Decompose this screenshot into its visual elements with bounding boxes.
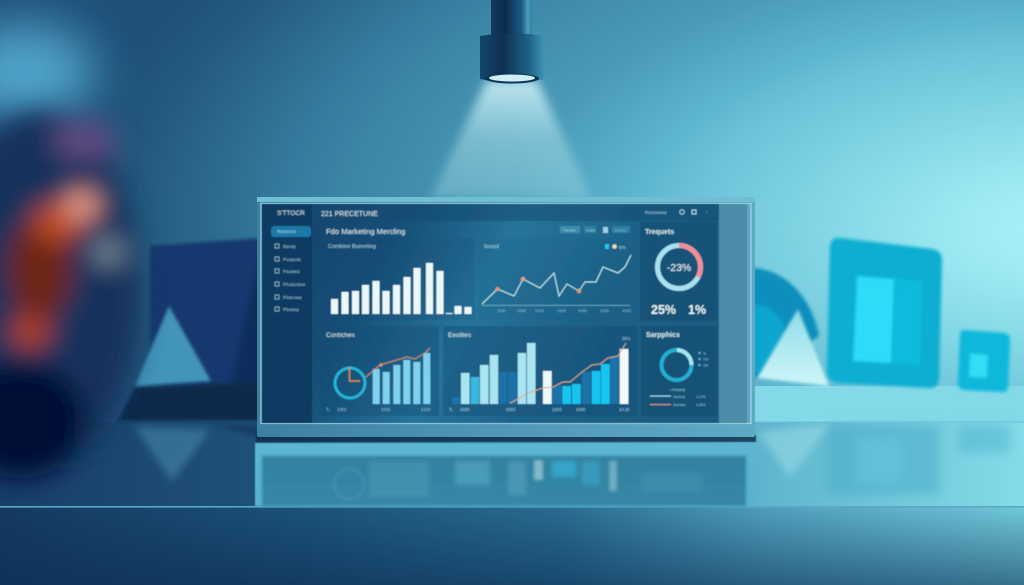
arc shape [750,268,819,378]
panel: summary donut: Jor [703,364,709,368]
floor [0,422,1024,507]
sidebar [262,204,312,423]
monitor frame [257,197,755,437]
blurred triangle left [135,306,211,386]
panel: donut gauge: 1% [688,303,706,317]
background wall [0,0,1024,424]
floor line [0,506,1024,508]
lamp [480,0,544,84]
panel: mixed bar chart: Eeolites [448,332,472,339]
panel: line chart: 1005 [517,308,527,313]
dark block shadow [230,248,262,386]
light triangle [757,309,829,386]
panel: line chart: 1000 [622,308,632,313]
sidebar: S'TTOCR [277,210,305,217]
panel: mixed bar chart: 1040 [576,407,586,412]
top bar: Rersonsve [645,210,667,215]
panel: summary donut: Sarpphics [646,332,680,339]
triangle reflection left [135,427,210,482]
blurred orange sphere [0,112,140,478]
filter tabs: Sroces [614,228,626,232]
small square [958,330,1010,392]
panel: summary donut: 3₁ [703,352,707,356]
panel: mixed bar chart [443,326,637,416]
panel: line chart [478,238,637,320]
blurred halo top left [0,24,95,120]
panel: donut gauge: -23% [667,262,691,274]
panel: mixed bar chart: T₁ [449,407,454,412]
panel: combo chart: 1303 [337,407,347,412]
panel: line chart: 1030 [578,308,588,313]
panel: summary donut: 1.819 [696,403,706,407]
panel: summary donut: 1.170 [696,395,706,399]
dark ledge left [118,382,262,421]
monitor shadow on floor [256,435,756,442]
blurred shapes right [750,238,1010,495]
filter tabs: Tiwnee [563,228,577,232]
top bar [312,204,719,221]
panel: summary donut: Socstor [673,403,687,407]
sidebar: Puopeds [283,257,302,262]
panel: line chart: 1025 [600,308,610,313]
large square [827,238,942,388]
panel: line chart: 0% [619,245,627,251]
panel: summary donut: • Rolanty [670,388,685,392]
panel: mixed bar chart: 1303 [552,407,562,412]
panel: combo chart: 1420 [421,407,431,412]
filter tabs [560,226,630,233]
sidebar: Reutonce [277,229,297,234]
sidebar: Pleaasy [283,307,300,312]
panel: mixed bar chart: 0303 [506,407,516,412]
shadow strip on floor [210,424,262,438]
panel: summary donut: 7% [703,358,709,362]
panel: donut gauge: 25% [651,303,676,317]
panel: line chart: 1030 [497,308,507,313]
panel: combo chart: 1030 [381,407,391,412]
top bar: 221 PRECETUNE [321,211,378,218]
panel: line chart: Isurpd [484,244,499,250]
dashboard screen [262,204,747,423]
panel: bar chart: Combine Buenrting [328,244,376,250]
panel: combo chart: Contiches [326,332,356,339]
panel: mixed bar chart: 14.20 [619,407,630,412]
lower floor band [0,507,1024,585]
blurred dark blue block behind monitor [150,238,262,386]
panel: donut gauge: Trequets [645,229,674,236]
panel: summary donut [641,326,717,416]
right edge strip [719,204,747,423]
light cone [430,80,592,199]
panel: bar chart [322,238,475,320]
panel: mixed bar chart: 1030 [460,407,470,412]
panel: line chart: 1025 [557,308,567,313]
sidebar: Bandy [283,244,297,249]
panel: combo chart: T₁ [326,407,331,412]
sidebar: Pleacoue [283,295,302,300]
sidebar: Paosted [283,269,300,274]
panel: line chart: 1010 [535,308,545,313]
panel: combo chart [320,326,439,416]
monitor reflection [255,443,755,506]
panel: summary donut: Scotod [673,395,685,399]
top bar: : [706,210,707,216]
sidebar: Phoductive [283,282,306,287]
main heading: Fdo Marketing Mercling [326,227,405,236]
floor horizon line [750,422,1024,423]
panel: mixed bar chart: 20% [622,336,631,341]
filter tabs: Faad [586,228,595,232]
panel: donut gauge [640,222,717,321]
right wall ledge [750,386,1024,422]
reflections [826,425,940,495]
